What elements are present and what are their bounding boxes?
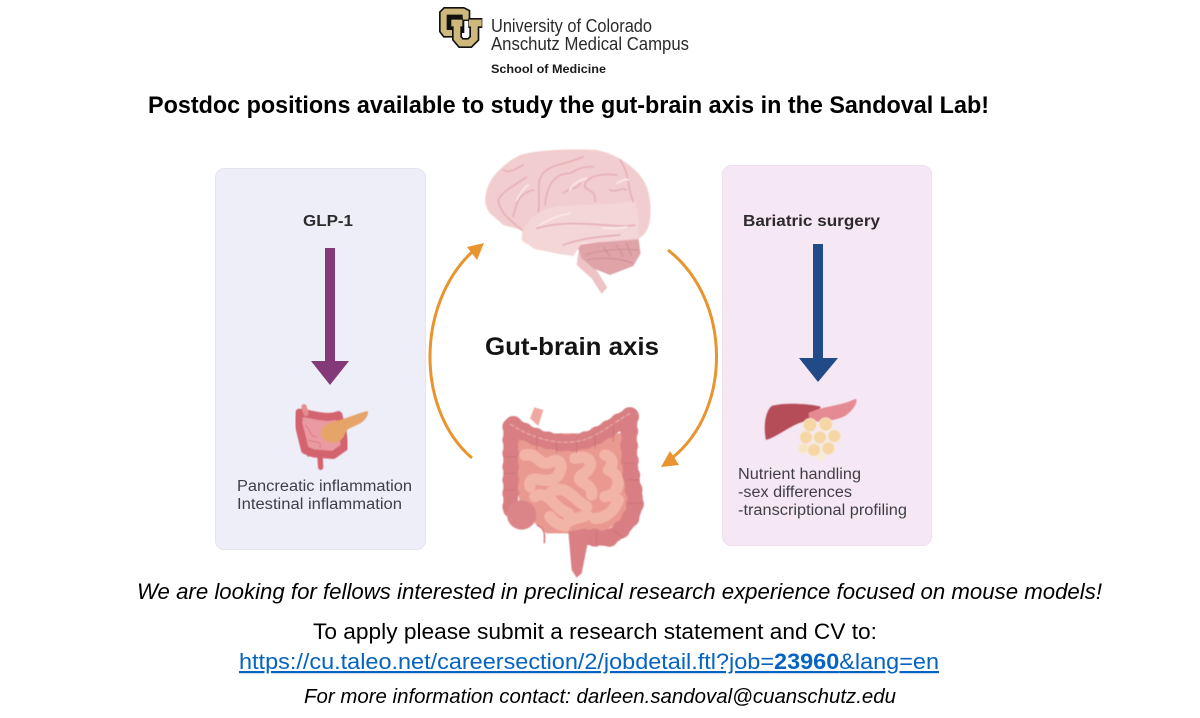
text: call for fellows: We are looking for fellows interested in preclinical research experience focused on mouse models! (137, 579, 1102, 604)
icon: CU interlocking emblem (444, 12, 482, 43)
icon: liver, pancreas and fat cells (765, 399, 856, 460)
text: outcomes: -sex differences (738, 484, 852, 501)
text: outcomes: Intestinal inflammation (237, 496, 402, 513)
text: outcomes (738, 466, 907, 519)
title: Postdoc positions available to study the gut-brain axis in the Sandoval Lab! (148, 92, 989, 119)
icon: intestines (503, 407, 642, 578)
icon: brain (485, 149, 651, 294)
text: outcomes: Pancreatic inflammation (237, 478, 412, 495)
heading: Gut-brain axis: Gut-brain axis (485, 333, 659, 361)
panel heading: Bariatric surgery: Bariatric surgery (743, 213, 880, 230)
panel heading: GLP-1: GLP-1 (303, 213, 353, 230)
logo: University of Colorado Anschutz Medical Campus (444, 12, 689, 76)
panel: GLP-1 (216, 168, 426, 550)
text: outcomes (237, 478, 412, 513)
text: outcomes: Nutrient handling (738, 466, 861, 483)
logo line: campus name: Anschutz Medical Campus (491, 33, 689, 54)
text: outcomes: -transcriptional profiling (738, 502, 907, 519)
icon: intestine and pancreas (298, 407, 368, 467)
logo line: university name: University of Colorado (491, 15, 652, 36)
logo line: school: School of Medicine (491, 64, 606, 76)
text: contact: For more information contact: darleen.sandoval@cuanschutz.edu (304, 686, 896, 708)
panel: Bariatric surgery (722, 166, 932, 546)
link: application URL: https://cu.taleo.net/careersection/2/jobdetail.ftl?job= 23960&lang=en (239, 649, 939, 674)
text: how to apply: To apply please submit a research statement and CV to: (313, 619, 877, 644)
arrow: brain to gut (661, 250, 717, 467)
arrow: purple down (311, 248, 349, 385)
arrow: blue down (799, 244, 838, 382)
arrow: gut to brain (430, 243, 484, 458)
